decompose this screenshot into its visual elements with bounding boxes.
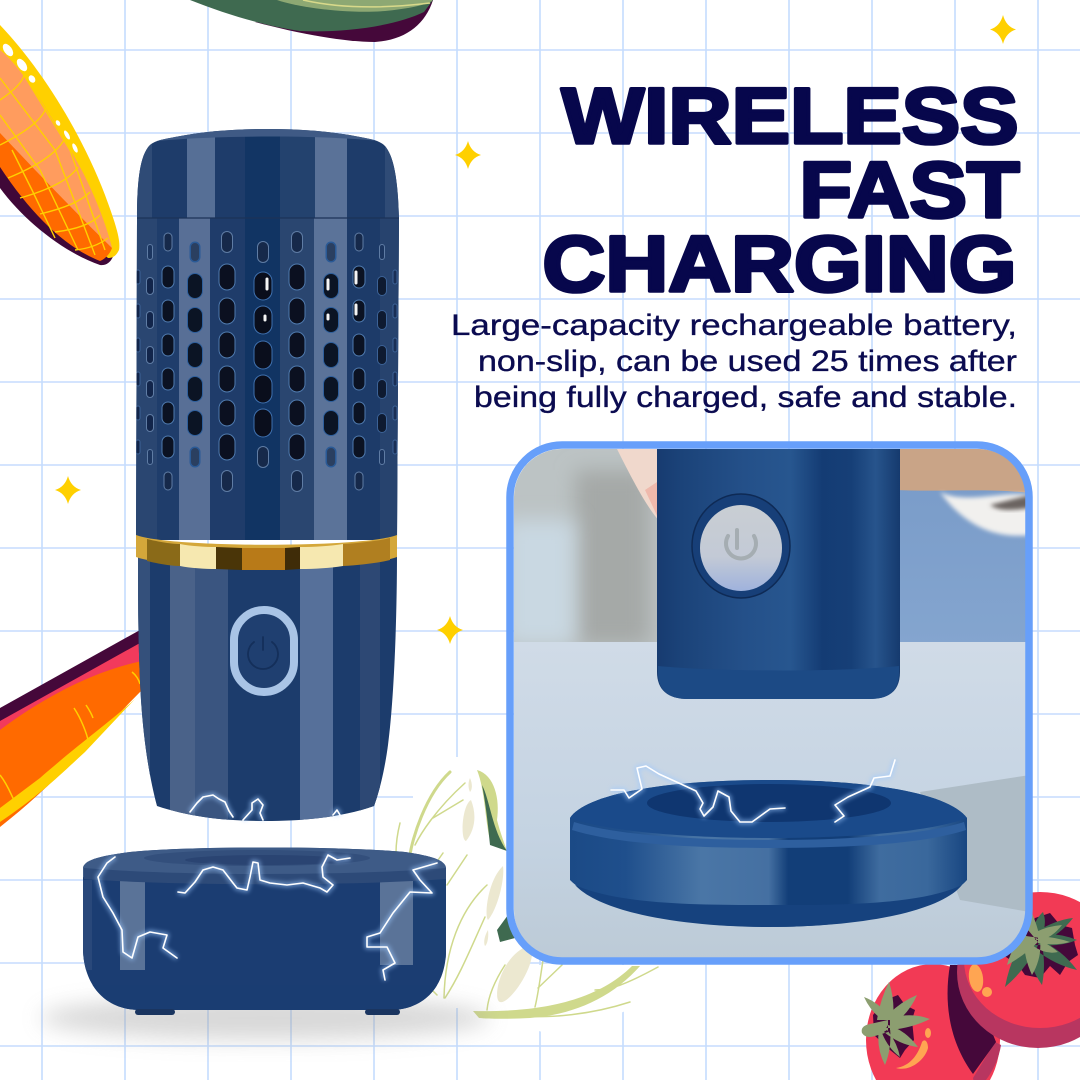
sparkle near title: [455, 141, 481, 169]
product: upper cap and perforated body: [136, 129, 399, 540]
lightning on photo base: [611, 760, 895, 822]
title: CHARGING: [542, 219, 1016, 308]
title: [542, 71, 1020, 308]
illustration: green leaf top: [190, 0, 433, 42]
description text: [451, 309, 1017, 414]
left tomato: [862, 964, 1001, 1080]
product: lightning on lower body: [190, 795, 340, 820]
illustration: carrot: [0, 630, 142, 827]
product: gold ring: [136, 535, 397, 570]
charging base in photo: [570, 780, 967, 927]
title: FAST: [800, 145, 1020, 234]
backdrop: [505, 445, 1030, 645]
table shadow: [920, 775, 1030, 912]
ventilation holes: [138, 237, 395, 486]
title: WIRELESS: [562, 71, 1018, 160]
perforated stripes: [130, 218, 400, 543]
sparkle left: [55, 476, 81, 504]
small holes: [147, 247, 153, 462]
description text: non-slip, can be used 25 times after: [478, 345, 1017, 378]
sparkle top right: [990, 15, 1016, 44]
panel: close-up photo of charging: [505, 445, 1030, 965]
power icon: [248, 637, 278, 669]
cup: device above base: [657, 445, 900, 699]
description text: Large-capacity rechargeable battery,: [451, 309, 1017, 342]
illustration: tomatoes: [862, 892, 1080, 1080]
panel border: [510, 445, 1029, 961]
decorative sparkles: [55, 15, 1016, 644]
product: lower body: [138, 557, 397, 821]
product: wireless charging base: [80, 845, 450, 1015]
power button on body: [234, 610, 294, 692]
sparkle centre: [437, 616, 463, 644]
cap stripes: [137, 129, 399, 218]
lightning on charging base: [98, 855, 437, 980]
illustration: corn: [0, 25, 119, 265]
table surface: [510, 642, 1030, 965]
description text: being fully charged, safe and stable.: [474, 381, 1017, 414]
right tomato: [957, 892, 1080, 1048]
ground shadow under charging base: [40, 996, 490, 1040]
circular power button: [692, 494, 790, 598]
feet: [135, 1009, 175, 1015]
illustration: leek and leaves: [396, 770, 658, 1019]
